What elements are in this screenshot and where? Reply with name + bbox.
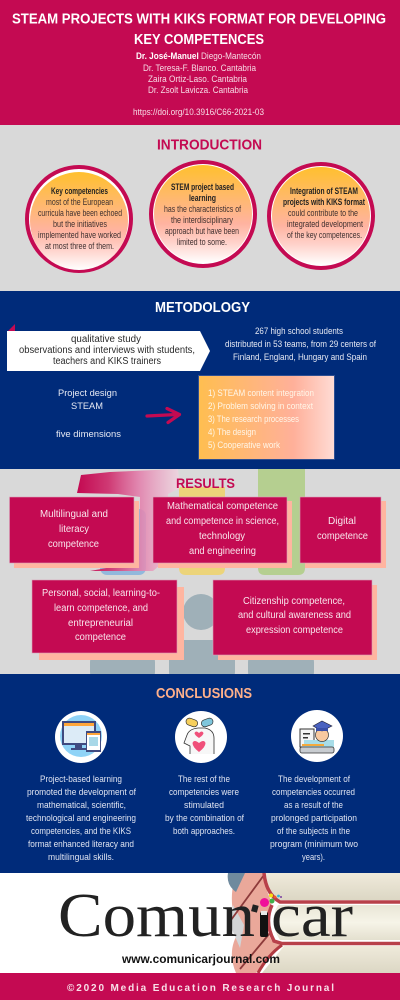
circle: STEM project based learning	[151, 162, 255, 266]
card: digital: Digital	[328, 516, 356, 527]
card: digital	[300, 497, 386, 568]
card: citizenship: expression competence	[246, 625, 343, 636]
participants text: Finland, England, Hungary and Spain	[233, 352, 367, 363]
card: multilingual: literacy	[59, 524, 89, 535]
text: development of competencies: The development of	[278, 774, 350, 785]
card: citizenship	[213, 580, 377, 660]
circle: integration of STEAM projects	[269, 164, 373, 268]
card: personal, social: Personal, social, learning-to-	[42, 588, 160, 599]
five dimensions box: 3) The research processes	[208, 414, 299, 425]
circle: integration of STEAM projects: could contribute to the	[288, 208, 358, 218]
project design text	[56, 388, 121, 440]
text: rest of the competencies: by the combination of	[165, 813, 244, 824]
copyright: ©2020 Media Education Research Journal	[67, 983, 334, 994]
text: project-based learning: technological and engineering	[26, 813, 136, 824]
authors: Dr. Zsolt Lavicza. Cantabria	[148, 85, 249, 96]
panel: methodology	[0, 291, 400, 469]
text: project-based learning: Project-based learning	[40, 774, 122, 785]
text: rest of the competencies: stimulated	[184, 800, 224, 811]
website: www.comunicarjournal.com	[121, 954, 280, 966]
circle: STEM project based learning: has the characteristics of	[164, 204, 241, 214]
card: personal, social: competence	[75, 632, 126, 643]
project design text: five dimensions	[56, 429, 121, 440]
text: development of competencies: of the subjects in the	[277, 826, 350, 837]
circle: integration of STEAM projects: integrated development	[287, 219, 363, 229]
arrow banner: qualitative study: qualitative study	[71, 334, 141, 345]
authors: Zaira Ortiz-Laso. Cantabria	[148, 74, 248, 85]
circle: STEM project based learning: limited to some.	[177, 237, 227, 247]
title	[12, 12, 386, 48]
text: project-based learning: competencies, and the KIKS	[31, 826, 131, 837]
circle: key competencies: most of the European	[46, 197, 113, 207]
text: development of competencies	[270, 774, 358, 863]
five dimensions box: 2) Problem solving in context	[208, 401, 313, 412]
authors: Dr. Teresa-F. Blanco. Cantabria	[143, 63, 257, 74]
title: KEY COMPETENCES	[134, 32, 264, 48]
circle: key competencies: at most three of them.	[45, 241, 114, 251]
card: citizenship: Citizenship competence,	[243, 596, 345, 607]
panel: results	[0, 469, 400, 682]
project design text: STEAM	[71, 401, 103, 412]
text: project-based learning: mathematical, scientific,	[37, 800, 126, 811]
illustration: books	[228, 873, 400, 973]
text: project-based learning: promoted the development of	[27, 787, 136, 798]
panel: conclusions	[0, 674, 400, 873]
circle: key competencies: but the initiatives	[53, 219, 107, 229]
circle: integration of STEAM projects: projects with KIKS format	[283, 197, 365, 207]
circle: integration of STEAM projects: Integration of STEAM	[290, 186, 358, 196]
arrow banner: qualitative study: teachers and KIKS trainers	[53, 356, 161, 367]
circle: key competencies: curricula have been echoed	[38, 208, 122, 218]
card: multilingual: competence	[48, 539, 99, 550]
five dimensions box: 4) The design	[208, 427, 256, 438]
background illustration: grey people	[90, 594, 314, 682]
text: project-based learning	[26, 774, 136, 863]
icon: computer and tablet	[55, 711, 107, 763]
icon: head with hearts	[175, 711, 227, 763]
card: citizenship: and cultural awareness and	[238, 610, 351, 621]
five dimensions box: 5) Cooperative work	[208, 440, 280, 451]
background illustration: coloured people	[100, 469, 305, 575]
card: mathematical: and competence in science,	[166, 516, 279, 527]
panel: logo with books	[0, 873, 400, 973]
text: rest of the competencies: The rest of the	[178, 774, 230, 785]
participants text	[225, 326, 376, 363]
text: project-based learning: multilingual skills.	[48, 852, 114, 863]
circle: key competencies: implemented have worked	[38, 230, 121, 240]
card: personal, social: entrepreneurial	[68, 618, 133, 629]
card: mathematical	[153, 497, 292, 568]
text: project-based learning: format enhanced literacy and	[28, 839, 134, 850]
card: multilingual: Multilingual and	[40, 509, 108, 520]
heading: metodology: METODOLOGY	[155, 299, 250, 316]
card: digital: competence	[317, 531, 368, 542]
text: development of competencies: prolonged participation	[271, 813, 357, 824]
card: multilingual	[10, 497, 139, 568]
circle: STEM project based learning: STEM project based	[171, 182, 234, 192]
panel: introduction	[0, 125, 400, 291]
five dimensions box: 1) STEAM content integration	[208, 388, 314, 399]
authors: Dr. José-Manuel Diego-Mantecón	[136, 51, 261, 62]
heading: results: RESULTS	[176, 475, 235, 491]
logo: Comunicar: car	[271, 882, 353, 950]
card: personal, social	[32, 580, 184, 660]
card: mathematical: and engineering	[189, 546, 256, 557]
text: development of competencies: as a result of the	[284, 800, 343, 811]
panel: header	[0, 0, 400, 125]
text: development of competencies: competencies occurred	[272, 787, 355, 798]
text: development of competencies: program (minimum two	[270, 839, 358, 850]
circle: STEM project based learning: approach but have been	[165, 226, 239, 236]
circle: key competencies	[27, 167, 131, 271]
arrow banner: qualitative study: observations and interviews with students,	[19, 345, 195, 356]
text: rest of the competencies	[165, 774, 244, 837]
arrow banner: qualitative study	[7, 324, 210, 371]
circle: STEM project based learning: the interdisciplinary	[171, 215, 233, 225]
text: rest of the competencies: competencies were	[169, 787, 239, 798]
card: mathematical: technology	[199, 531, 245, 542]
logo: Comunicar: Comun	[58, 882, 255, 950]
circle: integration of STEAM projects: of the key competences.	[287, 230, 362, 240]
heading: conclusions: CONCLUSIONS	[156, 686, 252, 702]
participants text: distributed in 53 teams, from 29 centers of	[225, 339, 376, 350]
heading: introduction: INTRODUCTION	[157, 136, 262, 154]
five dimensions box	[198, 376, 334, 460]
logo: Comunicar	[58, 882, 353, 950]
circle: STEM project based learning: learning	[189, 193, 216, 203]
doi link: https://doi.org/10.3916/C66-2021-03	[133, 107, 264, 118]
arrow	[147, 408, 180, 422]
text: rest of the competencies: both approaches.	[173, 826, 235, 837]
participants text: 267 high school students	[255, 326, 343, 337]
text: development of competencies: years).	[302, 852, 325, 863]
circle: key competencies: Key competencies	[51, 186, 108, 196]
authors	[136, 51, 261, 96]
icon: graduate with laptop	[291, 710, 343, 762]
panel: footer	[0, 973, 400, 1000]
card: personal, social: learn competence, and	[54, 603, 148, 614]
project design text: Project design	[58, 388, 117, 399]
brush stroke	[77, 469, 180, 571]
card: mathematical: Mathematical competence	[167, 501, 278, 512]
